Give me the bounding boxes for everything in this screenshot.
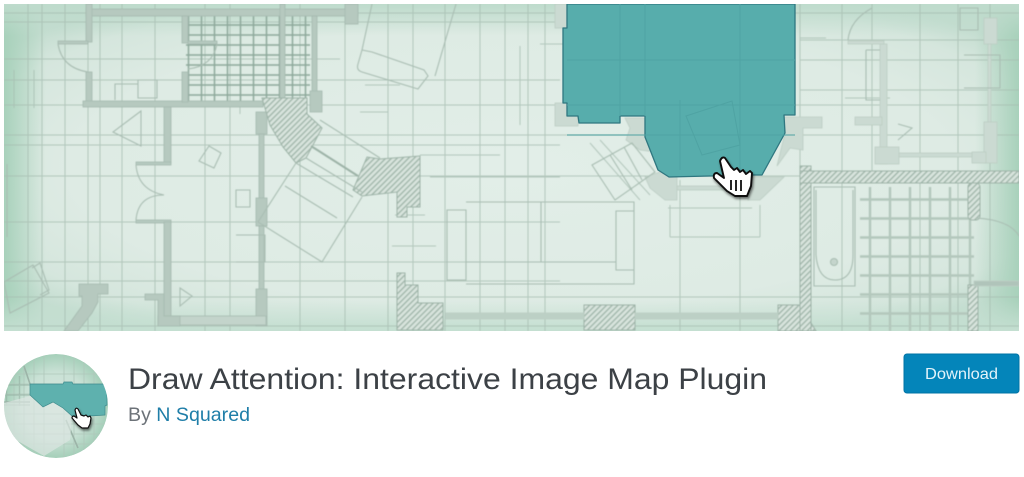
hatched walls <box>262 98 1019 331</box>
icon teal room <box>30 382 107 416</box>
download button <box>904 354 1019 393</box>
furniture and door outlines <box>4 4 1019 313</box>
faint lines over room <box>567 4 795 170</box>
plugin icon <box>4 354 108 458</box>
bathtub <box>814 187 855 286</box>
icon walls <box>4 366 78 455</box>
icon plan lines <box>4 354 108 458</box>
banner background gradient <box>4 4 1019 331</box>
door swings <box>58 8 1019 306</box>
icon hand cursor <box>72 408 91 428</box>
right-hand walls <box>880 44 887 164</box>
large sofa <box>447 202 634 284</box>
tilted sofa top <box>358 4 456 89</box>
icon: hand cursor <box>714 157 752 196</box>
plugin title: Draw Attention: Interactive Image Map Plugin <box>128 363 767 396</box>
chair in room <box>686 101 740 155</box>
download button: Download <box>925 366 998 383</box>
icon tiles <box>4 376 30 406</box>
floor plan drawing <box>4 4 1019 331</box>
icon light room <box>4 396 72 456</box>
grey walls <box>58 4 358 331</box>
light walls in right half <box>446 4 1019 319</box>
window bays <box>258 120 380 262</box>
tiled bathroom floor, top <box>186 16 310 101</box>
small chair <box>199 146 221 168</box>
duct / window detail <box>311 146 358 176</box>
tiled bathroom floor, bottom right <box>860 187 974 331</box>
plugin author: By N Squared <box>128 404 250 426</box>
banner: floor plan illustration <box>4 4 1019 331</box>
grid lines <box>4 4 1019 331</box>
highlighted teal room <box>563 4 795 177</box>
